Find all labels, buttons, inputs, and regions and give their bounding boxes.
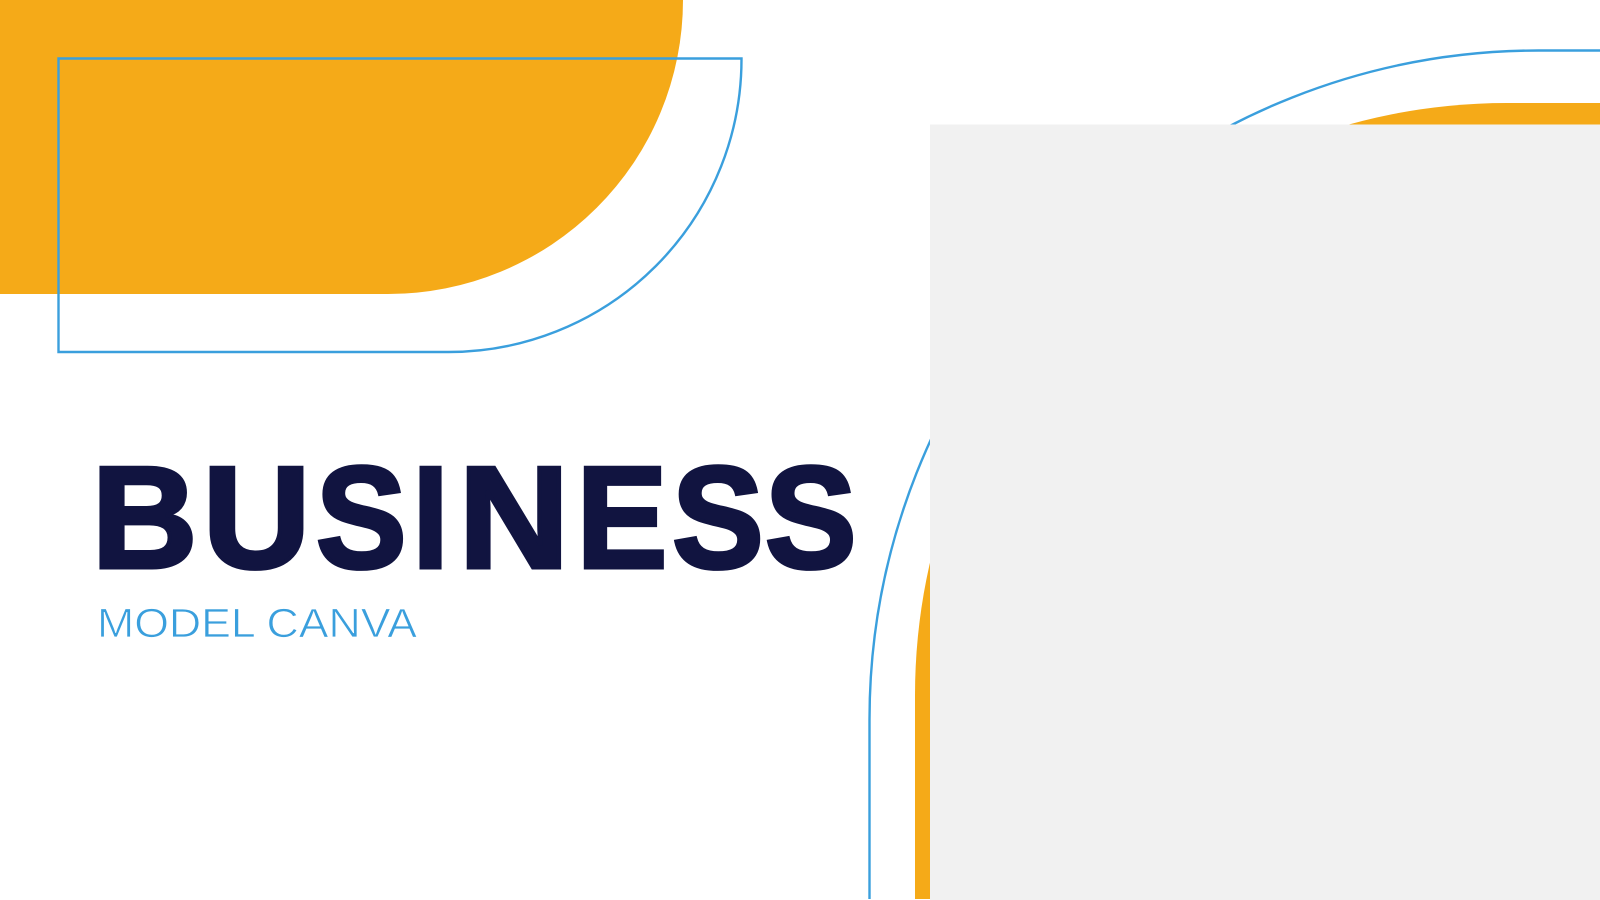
- title: S: [765, 436, 856, 598]
- blue outlined rounded shape: top left: [58, 58, 742, 352]
- grey image placeholder panel: [930, 124, 1600, 900]
- title: S: [672, 436, 764, 598]
- subtitle: MODEL CANVA: [97, 600, 418, 646]
- orange rounded shape: top left: [0, 0, 683, 294]
- blue arc outline: right: [870, 50, 1600, 899]
- title: E: [577, 436, 667, 598]
- title: B: [92, 436, 197, 598]
- title: S: [316, 436, 406, 598]
- title: I: [413, 436, 448, 598]
- orange arc shape: right: [915, 103, 1600, 899]
- title: N: [459, 436, 569, 598]
- title: U: [203, 436, 310, 598]
